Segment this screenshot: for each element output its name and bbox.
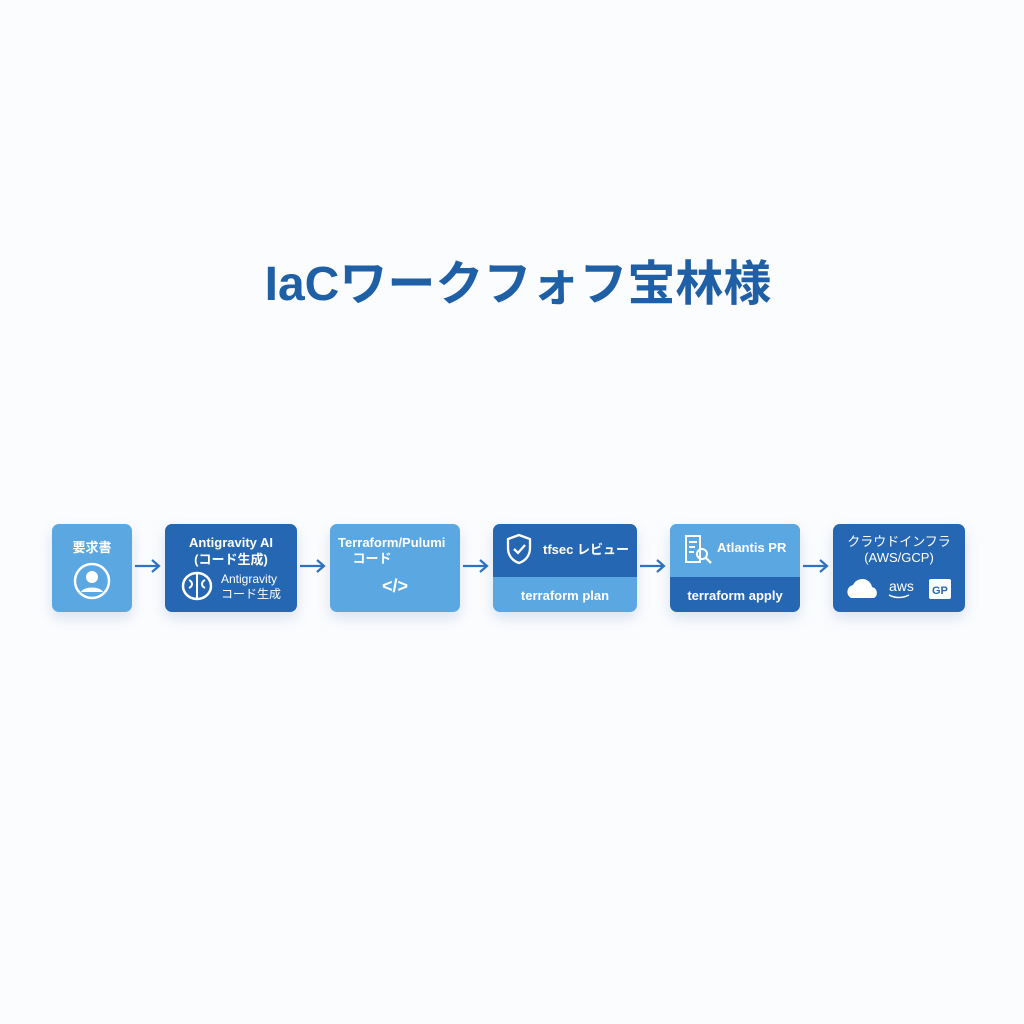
arrow 3 (463, 559, 489, 573)
icons: cloud providers: aws (889, 578, 914, 594)
box: atlantis (670, 524, 800, 612)
sublabel: Antigravity (221, 572, 277, 586)
sublabel (221, 572, 281, 601)
label (189, 535, 273, 567)
box: code (330, 524, 460, 612)
box: tfsec (493, 524, 637, 612)
label: 要求書 (72, 540, 112, 555)
arrow 5 (803, 559, 829, 573)
label: コード (352, 551, 391, 566)
icons: cloud providers: GP (932, 585, 948, 597)
title: IaCワークフォフ宝林様 (265, 258, 771, 311)
label: (コード生成) (194, 552, 268, 567)
arrow 1 (135, 559, 161, 573)
arrow 4 (640, 559, 666, 573)
icon: shield (506, 534, 532, 564)
top section (493, 524, 637, 577)
top section (670, 524, 800, 577)
box: requirements (52, 524, 132, 612)
sublabel: コード生成 (221, 587, 281, 601)
arrow 2 (300, 559, 326, 573)
box: antigravity (165, 524, 297, 612)
icon: code: </> (382, 576, 408, 596)
top section: Atlantis PR (717, 540, 786, 555)
label (847, 534, 951, 565)
icon: document search (685, 535, 712, 564)
bottom label: terraform plan (521, 588, 609, 603)
label: クラウドインフラ (847, 534, 951, 549)
box: cloud (833, 524, 965, 612)
icons: cloud providers (847, 578, 951, 599)
top section: tfsec レビュー (543, 542, 629, 557)
label: Antigravity AI (189, 535, 273, 550)
icon: user (74, 562, 110, 600)
label: Terraform/Pulumi (338, 535, 445, 550)
icon: brain (182, 572, 212, 600)
label (338, 535, 445, 566)
label: (AWS/GCP) (864, 550, 934, 565)
bottom label: terraform apply (687, 588, 783, 603)
